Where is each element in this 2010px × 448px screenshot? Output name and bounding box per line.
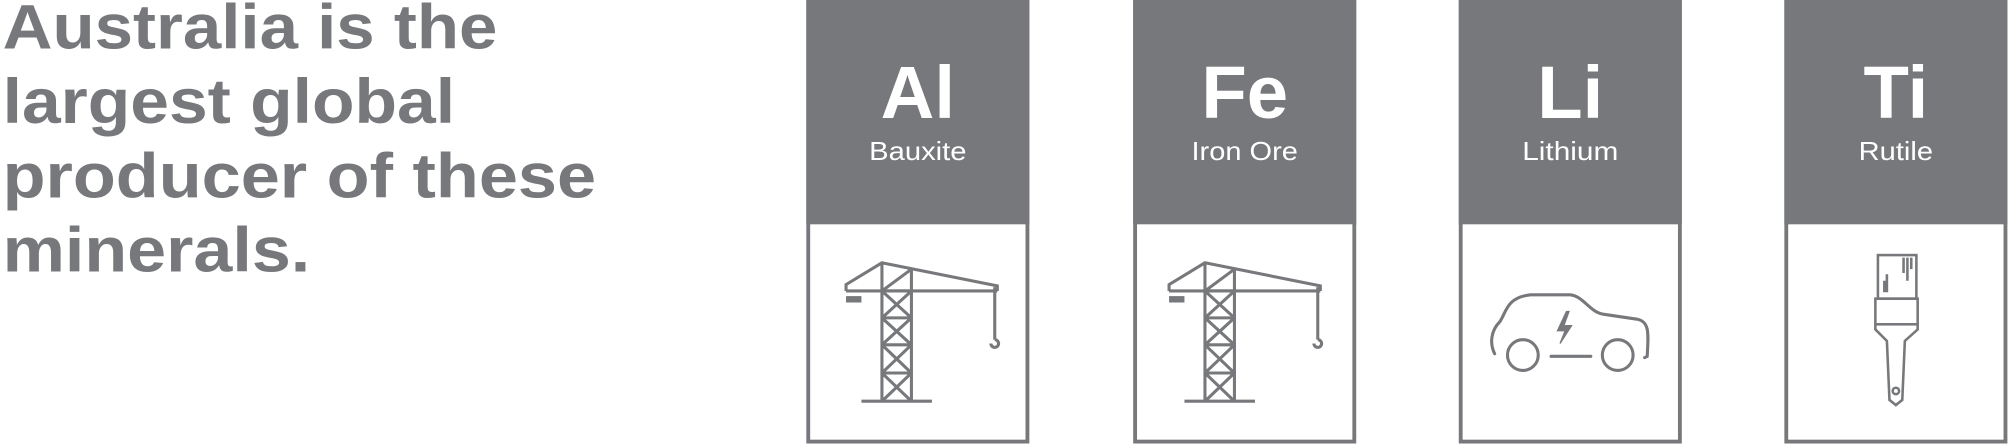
title <box>3 0 596 286</box>
title: largest global <box>3 67 455 137</box>
icon: paint brush <box>1875 255 1918 405</box>
card: Li Lithium <box>1459 0 1682 442</box>
card: Al Bauxite: Bauxite <box>869 138 967 166</box>
card: Li Lithium: Lithium <box>1522 138 1618 166</box>
title: minerals. <box>3 216 310 286</box>
icon: crane <box>846 263 999 401</box>
card: Fe Iron Ore: Iron Ore <box>1192 138 1298 166</box>
icon: electric car <box>1492 295 1648 370</box>
card: Al Bauxite <box>806 0 1029 442</box>
icon: crane <box>1169 263 1322 401</box>
card: Ti Rutile: Ti <box>1864 51 1928 134</box>
card: Ti Rutile <box>1784 0 2007 442</box>
card: Ti Rutile: Rutile <box>1859 138 1933 166</box>
card: Fe Iron Ore: Fe <box>1201 51 1288 134</box>
title: producer of these <box>3 141 596 211</box>
card: Fe Iron Ore <box>1133 0 1356 442</box>
card: Li Lithium: Li <box>1537 51 1603 134</box>
card: Al Bauxite: Al <box>881 51 955 134</box>
